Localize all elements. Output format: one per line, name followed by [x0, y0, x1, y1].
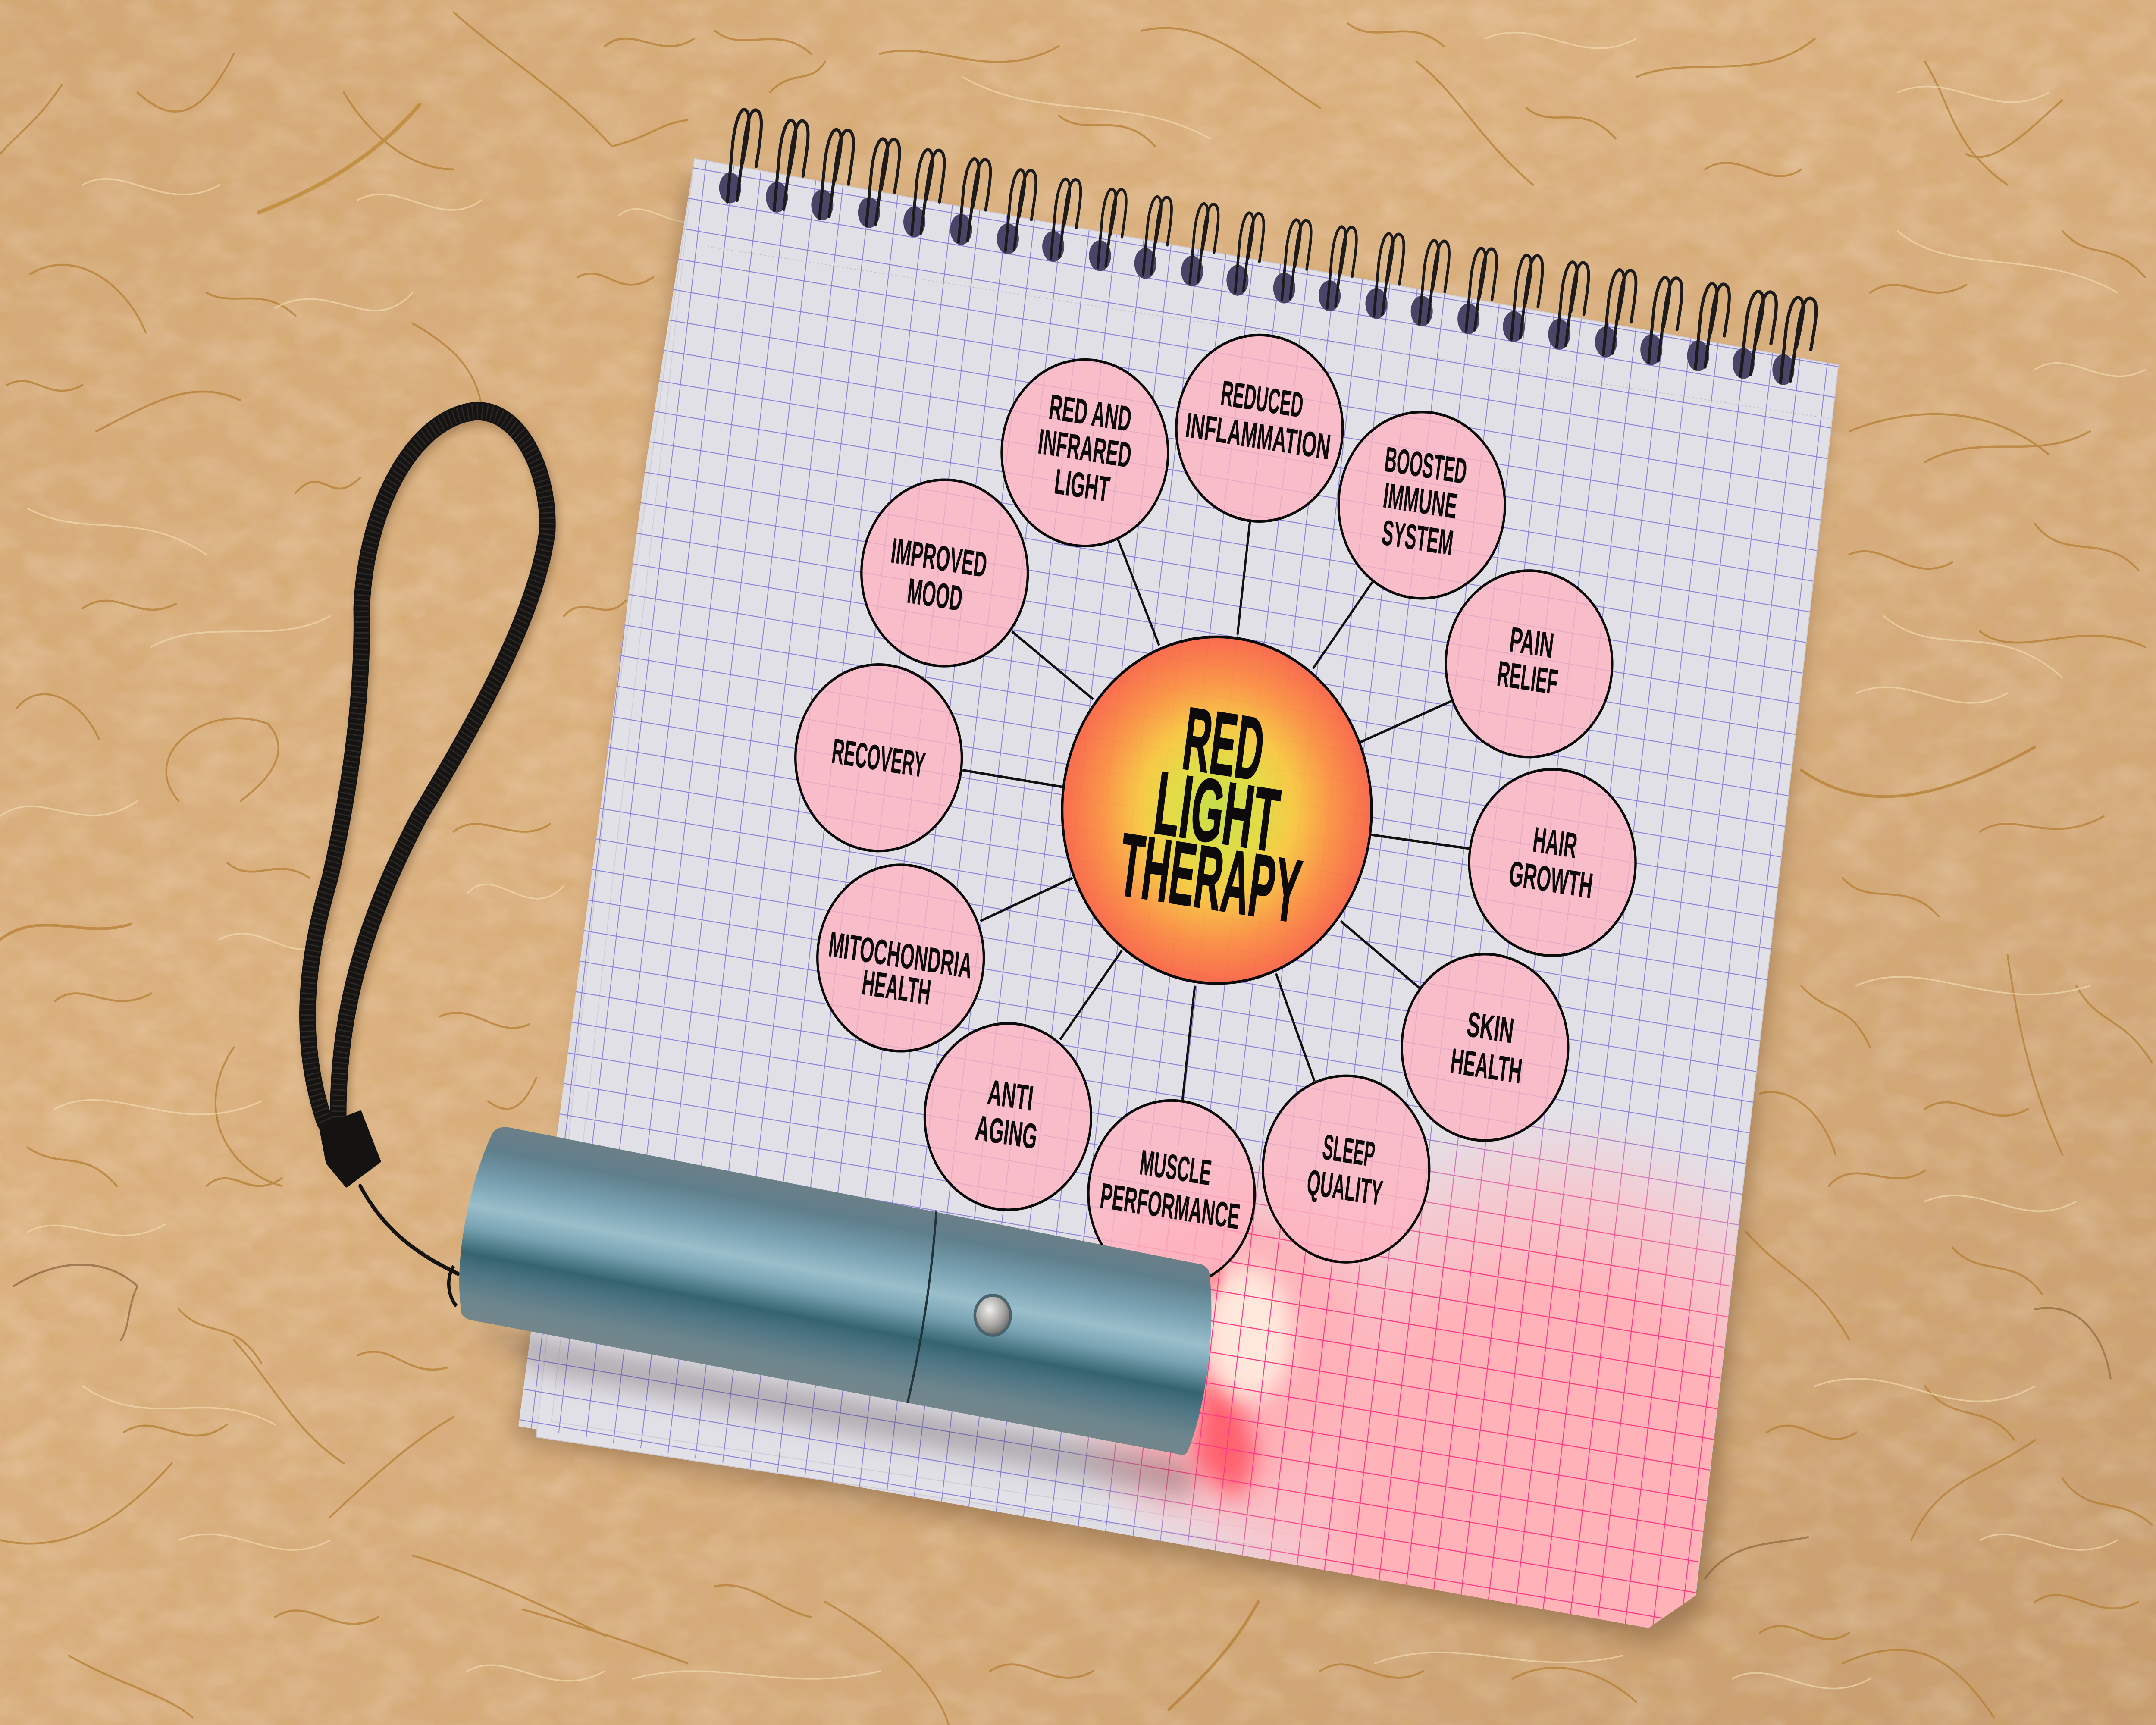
bubble: reduced inflammation: [1176, 335, 1343, 521]
bubble: hair growth: HAIR: [1531, 820, 1579, 866]
bubble: red and infrared light: RED AND: [1047, 387, 1134, 439]
bubble: pain relief: [1446, 571, 1612, 757]
notebook: [518, 158, 1839, 1628]
central hub: red light therapy: LIGHT: [1150, 753, 1285, 871]
strap band: [307, 411, 548, 1121]
red light glow on paper: [1045, 924, 1898, 1663]
bubble: reduced inflammation: REDUCED: [1219, 373, 1306, 425]
body seam: [908, 1211, 937, 1403]
central hub: red light therapy: THERAPY: [1114, 814, 1306, 941]
perforation line: [707, 246, 1831, 419]
bubble: pain relief: PAIN: [1507, 620, 1556, 665]
connector lines: [962, 522, 1470, 1100]
clasp: [320, 1112, 379, 1186]
flashlight shadow: [467, 1324, 1199, 1497]
bubble: hair growth: [1469, 769, 1636, 956]
bubble: anti aging: AGING: [973, 1108, 1040, 1157]
bubble: skin health: HEALTH: [1448, 1041, 1524, 1091]
bubble: anti aging: [924, 1023, 1091, 1210]
bubble: sleep quality: QUALITY: [1305, 1163, 1385, 1213]
bubble: red and infrared light: [1002, 360, 1168, 546]
bubble: recovery: RECOVERY: [830, 731, 927, 785]
bubble: sleep quality: SLEEP: [1320, 1128, 1377, 1174]
bubble: skin health: SKIN: [1465, 1005, 1516, 1051]
strap shadow: [310, 416, 550, 1126]
spiral binding: [719, 110, 1816, 385]
bubble: improved mood: MOOD: [905, 571, 965, 619]
bubble: red and infrared light: INFRARED: [1036, 422, 1134, 475]
bubble: hair growth: GROWTH: [1507, 854, 1595, 906]
bubble: recovery: [796, 665, 962, 851]
bubble: boosted immune system: BOOSTED: [1382, 440, 1469, 492]
bubble: muscle performance: [1088, 1101, 1255, 1287]
thin cord: [360, 1186, 458, 1274]
notebook drop shadow: [516, 177, 1829, 1642]
bubble: muscle performance: MUSCLE: [1138, 1143, 1213, 1193]
cord knot: [449, 1266, 457, 1306]
strap braid texture: [307, 411, 548, 1121]
flashlight: [449, 1127, 1211, 1455]
bubble: pain relief: RELIEF: [1495, 654, 1560, 702]
bubble: anti aging: ANTI: [986, 1073, 1035, 1119]
bubble: boosted immune system: [1338, 412, 1505, 599]
lower sheets of paper: [518, 159, 1838, 1628]
bubble: mitochondria health: MITOCHONDRIA: [827, 925, 975, 986]
power button: [974, 1294, 1012, 1337]
bubble: mitochondria health: HEALTH: [860, 963, 933, 1013]
bubble: improved mood: IMPROVED: [889, 531, 989, 585]
central hub: red light therapy: RED: [1178, 688, 1269, 800]
bubble: skin health: [1402, 954, 1568, 1141]
bubble: sleep quality: [1263, 1076, 1429, 1262]
bubble: improved mood: [862, 480, 1028, 666]
bubble: boosted immune system: SYSTEM: [1380, 513, 1455, 563]
top sheet of paper: [552, 159, 1838, 1596]
bubble: reduced inflammation: INFLAMMATION: [1184, 406, 1333, 467]
wrist strap: [307, 411, 550, 1274]
flashlight body: [459, 1127, 1211, 1455]
bubble: boosted immune system: IMMUNE: [1381, 476, 1460, 526]
central hub: red light therapy: [1062, 637, 1372, 983]
bubble: muscle performance: PERFORMANCE: [1098, 1176, 1242, 1237]
bubble: red and infrared light: LIGHT: [1053, 462, 1112, 509]
bubble: mitochondria health: [818, 865, 984, 1051]
